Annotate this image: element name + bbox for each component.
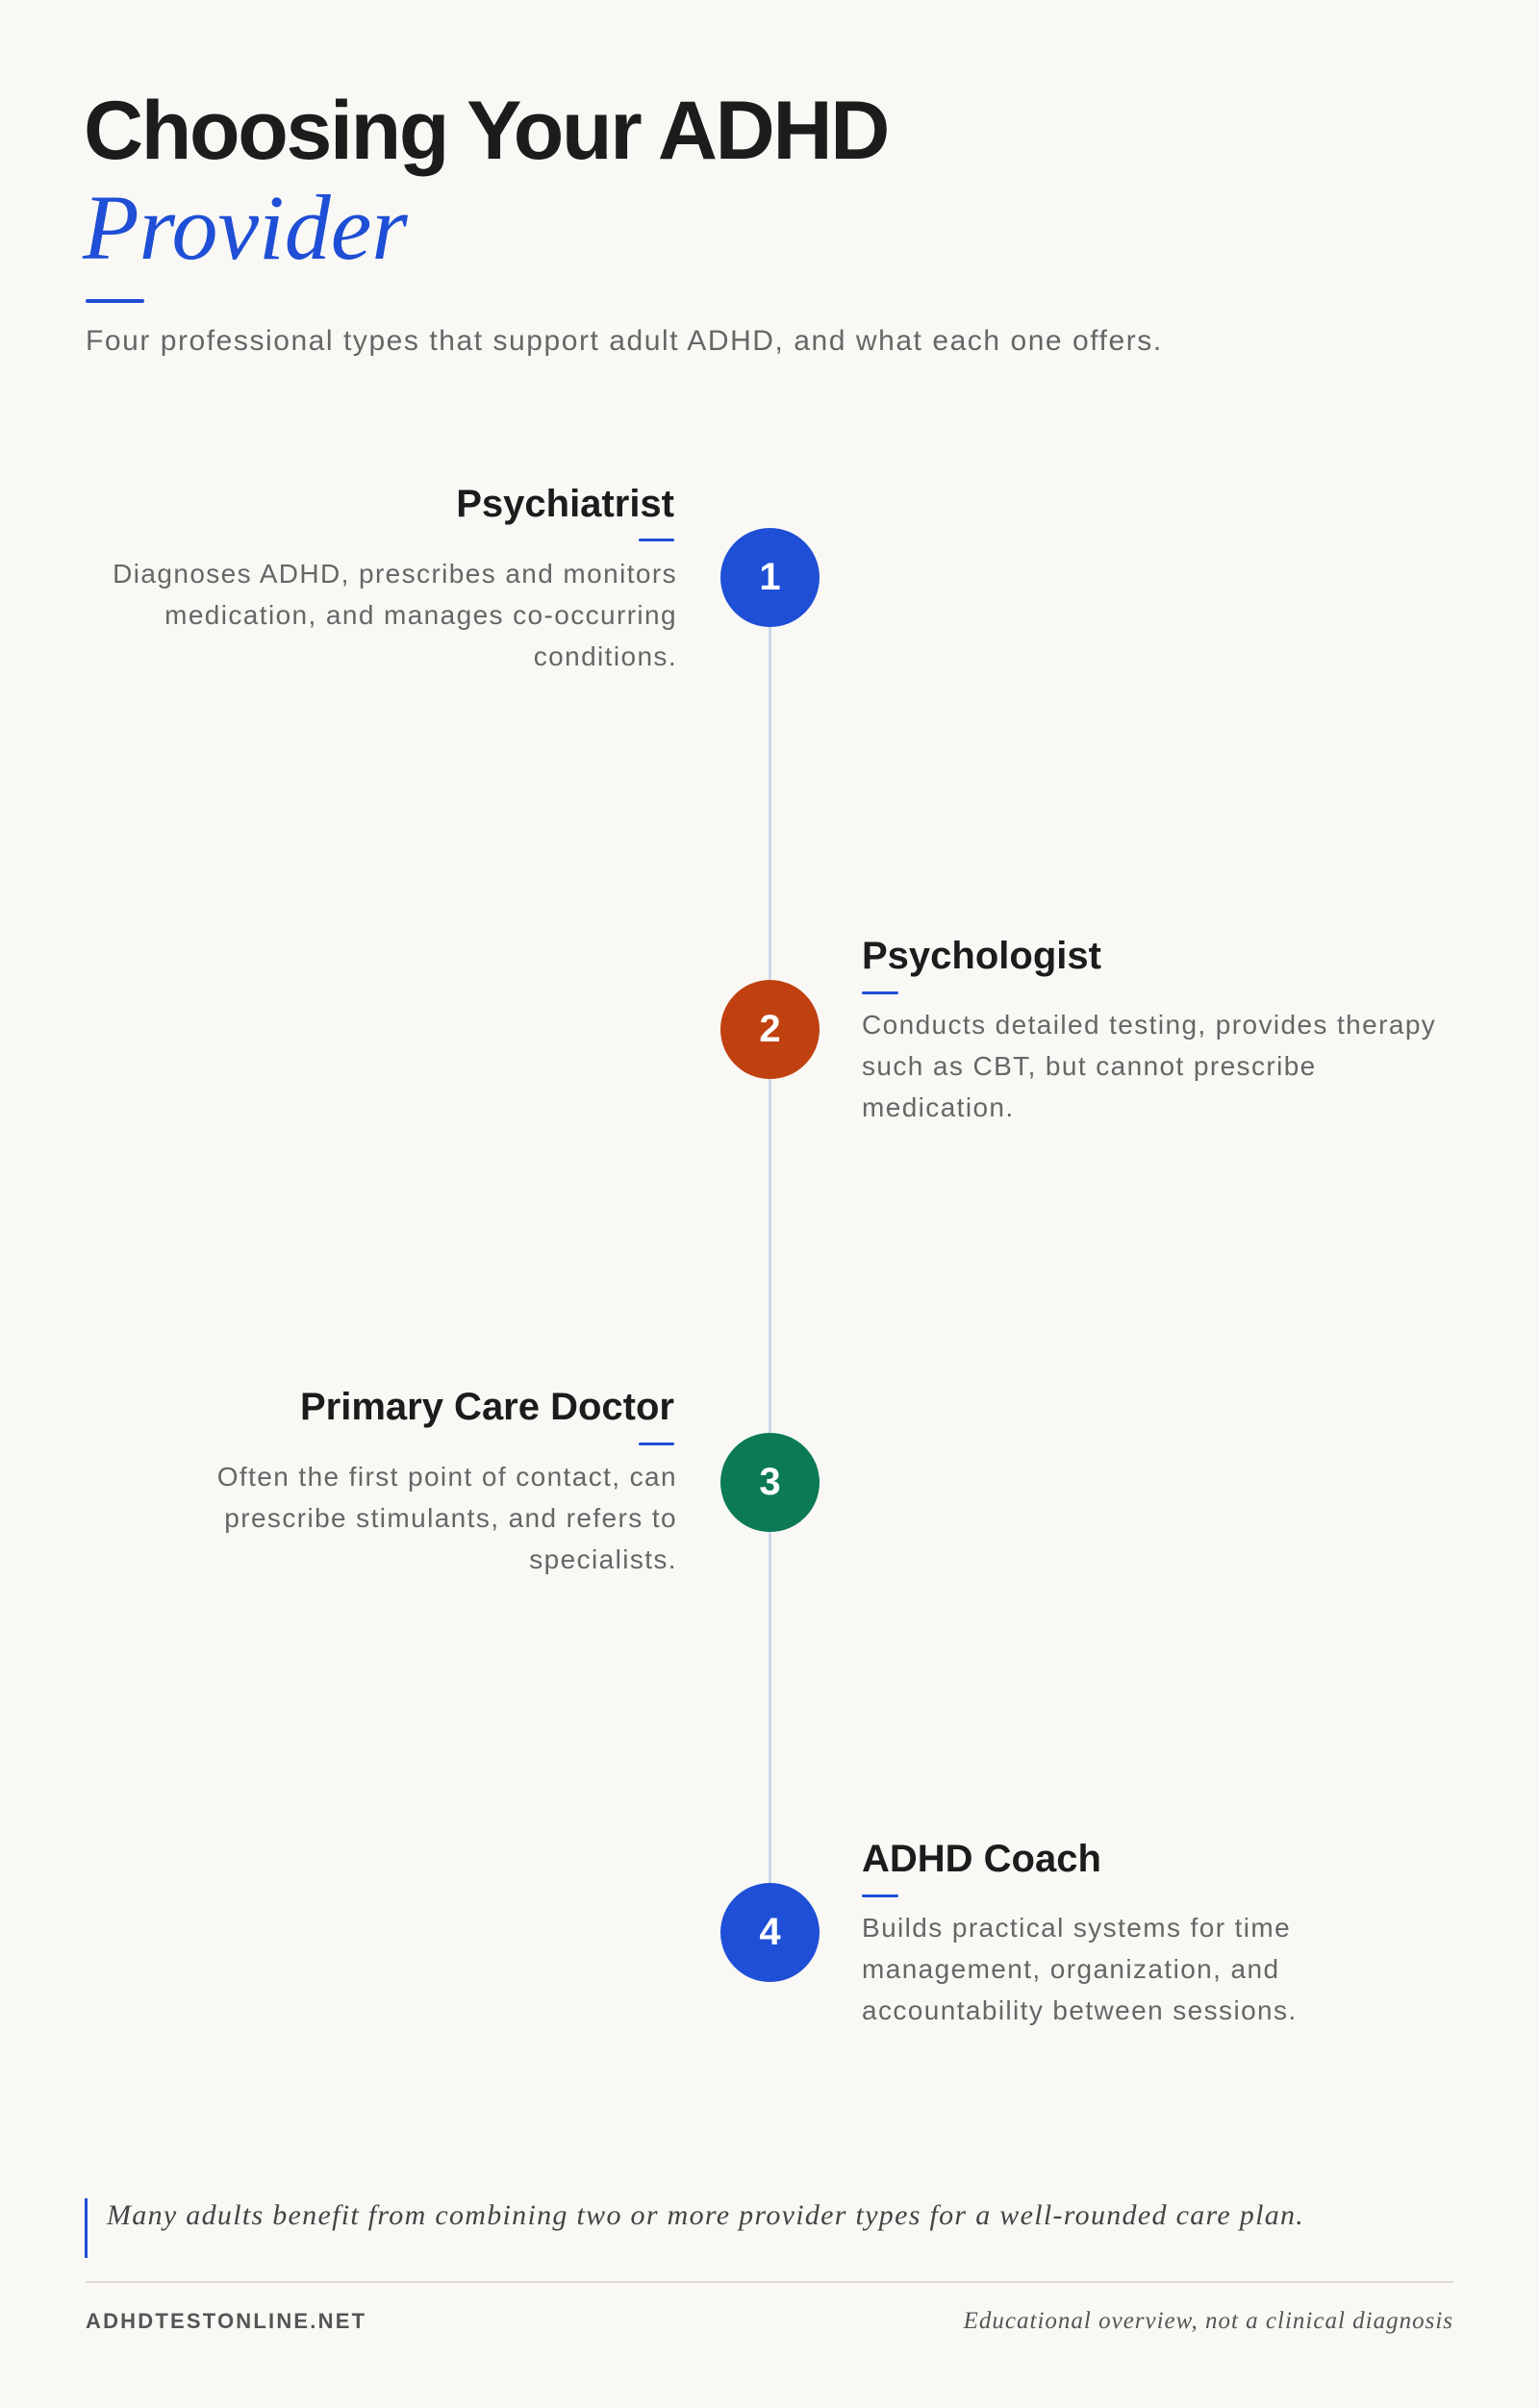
step 1 title: Psychiatrist [456,483,674,525]
intro text: Four professional types that support adult ADHD, and what each one offers. [86,325,1163,357]
step 4 circle [720,1883,820,1982]
footer disclaimer: Educational overview, not a clinical diagnosis [964,2308,1453,2334]
step 4 text: Builds practical systems for time [862,1913,1291,1943]
title: Choosing Your ADHD [84,85,888,177]
accent line [86,299,144,303]
step 4 text [862,1913,1298,2025]
step 3: Primary Care Doctor [217,1386,820,1574]
step 1 text: medication, and manages co-occurring [164,600,677,630]
step 1 circle [720,528,820,627]
subtitle accent: Provider [83,176,408,279]
footer source: ADHDTESTONLINE.NET [86,2309,366,2333]
step 4 circle: 4 [759,1911,781,1953]
step 2 title: Psychologist [862,935,1101,977]
step 3 text: prescribe stimulants, and refers to [224,1503,677,1533]
step 4 text: management, organization, and [862,1954,1279,1984]
step 2 text [862,1010,1436,1122]
step 1: Psychiatrist [113,483,820,671]
step 4 text: accountability between sessions. [862,1995,1298,2025]
step 3 text: Often the first point of contact, can [217,1462,677,1492]
step 3 text: specialists. [529,1544,677,1574]
step 3 circle: 3 [759,1461,781,1503]
step 3 circle [720,1433,820,1532]
step 3 text [217,1462,677,1574]
step 3 title: Primary Care Doctor [300,1386,674,1428]
step 2 text: such as CBT, but cannot prescribe [862,1051,1317,1081]
step 2 text: Conducts detailed testing, provides therapy [862,1010,1436,1040]
step 1 circle: 1 [759,556,781,598]
step 1 text [113,559,677,671]
step 2 text: medication. [862,1092,1015,1122]
step 1 text: conditions. [534,641,677,671]
callout quote [85,2198,1451,2258]
step 4: ADHD Coach [720,1838,1298,2025]
step 2 circle [720,980,820,1079]
step 1 text: Diagnoses ADHD, prescribes and monitors [113,559,677,589]
timeline line [769,577,771,1933]
step 4 title: ADHD Coach [862,1838,1101,1880]
step 2: Psychologist [720,935,1436,1122]
callout quote: Many adults benefit from combining two or more provider types for a well-rounded care plan. [107,2199,1304,2231]
step 2 circle: 2 [759,1008,781,1050]
